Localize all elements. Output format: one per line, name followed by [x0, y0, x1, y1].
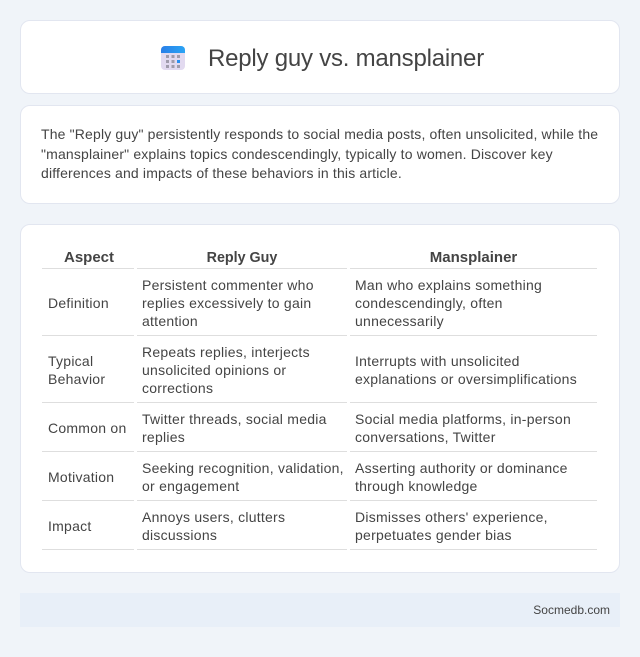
footer bar	[20, 593, 620, 627]
row: impact: perpetuates gender bias	[355, 527, 512, 543]
row: common on: conversations, Twitter	[355, 429, 496, 445]
row: impact: Dismisses others' experience,	[355, 509, 548, 525]
table headers: Aspect	[64, 249, 114, 266]
icon: calendar	[161, 46, 185, 70]
row: common on	[48, 411, 571, 445]
intro text: "mansplainer" explains topics condescendingly, typically to women. Discover key	[41, 146, 553, 162]
row: definition: Man who explains something	[355, 277, 542, 293]
row: typical behavior: Behavior	[48, 371, 105, 387]
row: typical behavior: explanations or oversimplifications	[355, 371, 577, 387]
row: common on: Twitter threads, social media	[142, 411, 327, 427]
table headers: Reply Guy	[207, 250, 277, 266]
row: definition: unnecessarily	[355, 313, 444, 329]
row: typical behavior: Repeats replies, interjects	[142, 344, 310, 360]
row: definition: condescendingly, often	[355, 295, 503, 311]
table headers: Mansplainer	[430, 249, 517, 266]
row: typical behavior: corrections	[142, 380, 213, 396]
panel: intro	[20, 105, 620, 204]
row: definition: Definition	[48, 295, 109, 311]
row: impact	[48, 509, 548, 543]
row: motivation	[48, 460, 568, 494]
row: typical behavior: Interrupts with unsolicited	[355, 353, 520, 369]
row: impact: discussions	[142, 527, 217, 543]
row: definition: attention	[142, 313, 198, 329]
row: motivation: through knowledge	[355, 478, 478, 494]
panel: comparison table	[20, 224, 620, 573]
intro text: differences and impacts of these behaviors in this article.	[41, 165, 402, 181]
row: typical behavior: Typical	[48, 353, 93, 369]
row: motivation: Asserting authority or dominance	[355, 460, 568, 476]
row: motivation: Seeking recognition, validation,	[142, 460, 344, 476]
row: definition: Persistent commenter who	[142, 277, 314, 293]
row: typical behavior	[48, 344, 577, 396]
intro text	[41, 126, 598, 181]
footer text: Socmedb.com	[533, 603, 610, 617]
row: definition: replies excessively to gain	[142, 295, 311, 311]
row: definition	[48, 277, 542, 329]
row: impact: Annoys users, clutters	[142, 509, 285, 525]
title: Reply guy vs. mansplainer	[208, 45, 484, 72]
row: impact: Impact	[48, 518, 92, 534]
intro text: The "Reply guy" persistently responds to social media posts, often unsolicited, while the	[41, 126, 598, 142]
row: common on: replies	[142, 429, 185, 445]
row: motivation: or engagement	[142, 478, 239, 494]
row: common on: Social media platforms, in-person	[355, 411, 571, 427]
table headers	[64, 249, 517, 266]
panel: header	[20, 20, 620, 94]
row: typical behavior: unsolicited opinions or	[142, 362, 286, 378]
row: motivation: Motivation	[48, 469, 114, 485]
row: common on: Common on	[48, 420, 127, 436]
